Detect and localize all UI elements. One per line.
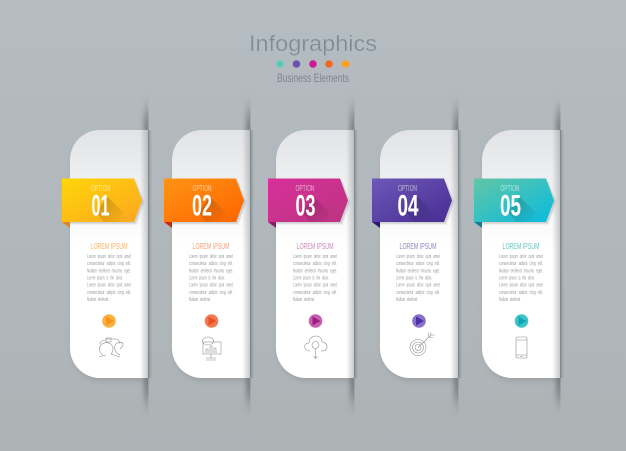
- ribbon: 01: [92, 190, 110, 222]
- body text: Lorem ipsum dolor spot amet: [396, 283, 440, 289]
- play button: [412, 314, 426, 328]
- play button: [102, 314, 116, 328]
- body text: Nullam eleifend.: [293, 297, 315, 303]
- ribbon: [372, 178, 452, 228]
- body text: Lorem ipsum dolor spot amet: [189, 254, 233, 260]
- heading: LOREM IPSUM: [400, 241, 436, 251]
- body text: [87, 254, 131, 303]
- heading: LOREM IPSUM: [90, 241, 128, 251]
- subtitle: Business Elements: Business Elements: [277, 71, 349, 85]
- ribbon: OPTION: [192, 184, 212, 193]
- body text: Lorem ipsum dolor spot amet: [499, 254, 543, 260]
- ribbon: [268, 178, 348, 228]
- body text: Lorem ipsum is the dolor.: [293, 276, 329, 282]
- panel: option 03: [268, 112, 358, 400]
- body text: [396, 254, 440, 303]
- play button: [309, 314, 322, 328]
- ribbon: [62, 178, 142, 228]
- body text: Lorem ipsum dolor spot amet: [499, 283, 543, 289]
- body text: consectetur adipis cing elit.: [396, 290, 440, 296]
- body text: consectetur adipis cing elit.: [189, 261, 233, 267]
- icon: people talking: [99, 338, 123, 357]
- ribbon: OPTION: [398, 184, 417, 193]
- ribbon: 05: [500, 190, 521, 222]
- ribbon: OPTION: [500, 184, 520, 193]
- play button: [205, 314, 218, 328]
- body text: Lorem ipsum is the dolor.: [189, 276, 225, 282]
- body text: Lorem ipsum dolor spot amet: [87, 254, 131, 260]
- ribbon: [164, 178, 244, 228]
- body text: Nullam eleifend.: [396, 297, 418, 303]
- panel: option 02: [164, 112, 254, 400]
- ribbon: OPTION: [296, 184, 315, 193]
- body text: Lorem ipsum dolor spot amet: [396, 254, 440, 260]
- body text: Lorem ipsum dolor spot amet: [293, 254, 337, 260]
- body text: consectetur adipis cing elit.: [499, 290, 543, 296]
- body text: consectetur adipis cing elit.: [189, 290, 233, 296]
- body text: consectetur adipis cing elit.: [396, 261, 440, 267]
- body text: Lorem ipsum is the dolor.: [396, 276, 432, 282]
- ribbon: 04: [398, 190, 419, 222]
- body text: Nullam eleifend rhoums eget.: [396, 268, 440, 274]
- body text: Nullam eleifend rhoums eget.: [189, 268, 233, 274]
- panel: option 01: [62, 112, 152, 400]
- body text: consectetur adipis cing elit.: [293, 261, 337, 267]
- panel: option 05: [474, 112, 564, 400]
- body text: Nullam eleifend rhoums eget.: [499, 268, 543, 274]
- body text: [293, 254, 337, 303]
- body text: [499, 254, 543, 303]
- title: Infographics: Infographics: [249, 31, 377, 56]
- body text: Nullam eleifend rhoums eget.: [87, 268, 131, 274]
- ribbon: [474, 178, 554, 228]
- body text: consectetur adipis cing elit.: [293, 290, 337, 296]
- ribbon: OPTION: [91, 184, 110, 193]
- body text: [189, 254, 233, 303]
- body text: Nullam eleifend rhoums eget.: [293, 268, 337, 274]
- body text: Lorem ipsum dolor spot amet: [189, 283, 233, 289]
- body text: Lorem ipsum dolor spot amet: [87, 283, 131, 289]
- icon: cloud download: [305, 336, 327, 358]
- icon: target with arrow: [410, 332, 435, 356]
- body text: Lorem ipsum dolor spot amet: [293, 283, 337, 289]
- icon: smartphone: [516, 337, 527, 358]
- heading: LOREM IPSUM: [296, 241, 334, 251]
- body text: consectetur adipis cing elit.: [499, 261, 543, 267]
- colored dots row: [276, 60, 349, 68]
- panel: option 04: [372, 112, 462, 400]
- body text: Nullam eleifend.: [87, 297, 109, 303]
- body text: Lorem ipsum is the dolor.: [87, 276, 123, 282]
- body text: consectetur adipis cing elit.: [87, 290, 131, 296]
- ribbon: 03: [296, 190, 316, 222]
- heading: LOREM IPSUM: [192, 241, 230, 251]
- ribbon: 02: [192, 190, 212, 222]
- body text: Nullam eleifend.: [499, 297, 521, 303]
- play button: [515, 314, 528, 328]
- body text: Nullam eleifend.: [189, 297, 211, 303]
- icon: chart and speech bubble: [202, 337, 221, 360]
- body text: Lorem ipsum is the dolor.: [499, 276, 535, 282]
- heading: LOREM IPSUM: [502, 241, 540, 251]
- body text: consectetur adipis cing elit.: [87, 261, 131, 267]
